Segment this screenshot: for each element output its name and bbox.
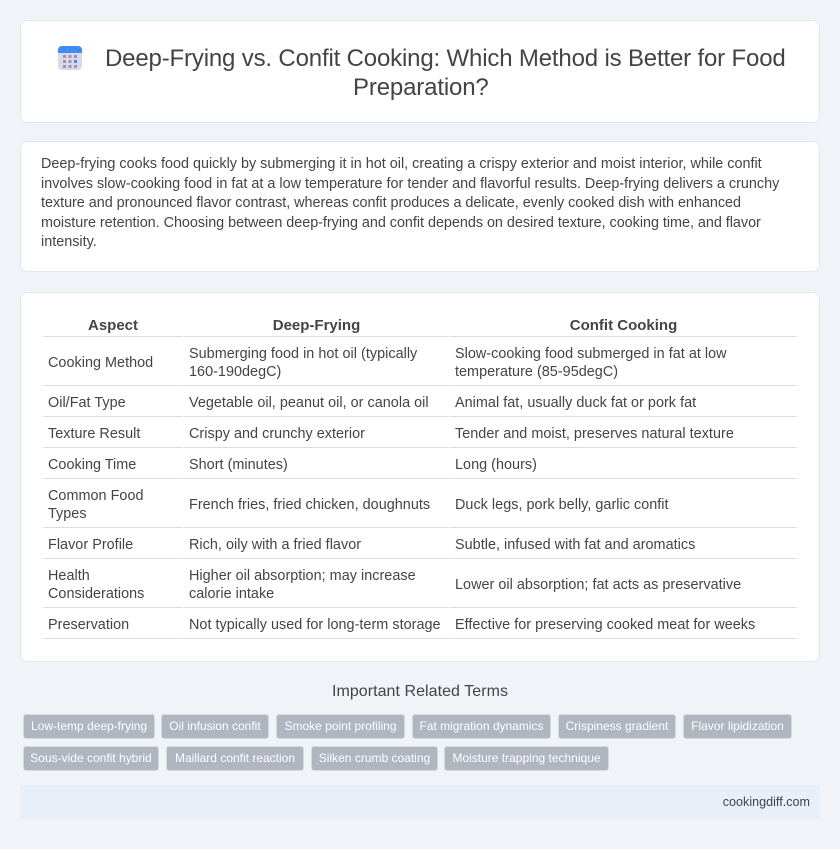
- header card: [20, 20, 820, 123]
- intro card: [20, 141, 820, 272]
- table rows: Texture Result: [48, 426, 140, 442]
- table rows: calorie intake: [189, 586, 274, 602]
- table rows: Crispy and crunchy exterior: [189, 426, 365, 442]
- table rows: Cooking Time: [48, 457, 136, 473]
- intro text: moisture retention. Choosing between deep-frying and confit depends on desired texture, cooking time, and flavor: [41, 214, 761, 230]
- intro text: involves slow-cooking food in fat at a low temperature for tender and flavorful results. Deep-frying delivers a crunchy: [41, 176, 779, 192]
- table rows: Submerging food in hot oil (typically: [189, 346, 417, 362]
- related terms tags: Crispiness gradient: [566, 719, 668, 733]
- table rows: Considerations: [48, 586, 144, 602]
- intro text: intensity.: [41, 234, 97, 250]
- table rows: Types: [48, 506, 87, 522]
- table rows: Common Food: [48, 488, 144, 504]
- table rows: Short (minutes): [189, 457, 288, 473]
- table rows: Oil/Fat Type: [48, 395, 126, 411]
- related terms tags: Maillard confit reaction: [175, 751, 295, 765]
- table rows: Cooking Method: [48, 355, 153, 371]
- table rows: Not typically used for long-term storage: [189, 617, 441, 633]
- related terms heading: Important Related Terms: [332, 683, 508, 700]
- icon: calendar: [58, 46, 82, 70]
- table rows: Health: [48, 568, 90, 584]
- table rows: French fries, fried chicken, doughnuts: [189, 497, 430, 513]
- table rows: Lower oil absorption; fat acts as preservative: [455, 577, 741, 593]
- related terms tags: Silken crumb coating: [319, 751, 430, 765]
- table header: Aspect: [88, 317, 138, 334]
- related terms tags: Oil infusion confit: [169, 719, 261, 733]
- table rows: Preservation: [48, 617, 129, 633]
- related terms tags: Flavor lipidization: [691, 719, 784, 733]
- table header: [88, 317, 677, 334]
- table rows: Rich, oily with a fried flavor: [189, 537, 361, 553]
- title: Deep-Frying vs. Confit Cooking: Which Method is Better for Food: [105, 45, 786, 72]
- related terms tags: Moisture trapping technique: [452, 751, 601, 765]
- intro text: Deep-frying cooks food quickly by submerging it in hot oil, creating a crispy exterior and moist interior, while confit: [41, 156, 762, 172]
- related terms tags: Sous-vide confit hybrid: [30, 751, 152, 765]
- intro text: [41, 156, 780, 250]
- table rows: Slow-cooking food submerged in fat at low: [455, 346, 727, 362]
- intro text: texture and pronounced flavor contrast, whereas confit produces a delicate, evenly cooked dish with enhanced: [41, 195, 741, 211]
- table rows: Effective for preserving cooked meat for weeks: [455, 617, 755, 633]
- table rows: Higher oil absorption; may increase: [189, 568, 416, 584]
- related terms tags: Smoke point profiling: [284, 719, 397, 733]
- footer bar: [20, 785, 820, 819]
- related terms tags: Low-temp deep-frying: [31, 719, 147, 733]
- title: Preparation?: [353, 74, 489, 101]
- related terms tags: Fat migration dynamics: [419, 719, 544, 733]
- table rows: Vegetable oil, peanut oil, or canola oil: [189, 395, 429, 411]
- table rows: Animal fat, usually duck fat or pork fat: [455, 395, 696, 411]
- table rows: temperature (85-95degC): [455, 364, 618, 380]
- table rows: Tender and moist, preserves natural texture: [455, 426, 734, 442]
- table rows: [43, 336, 797, 639]
- table rows: Long (hours): [455, 457, 537, 473]
- table rows: 160-190degC): [189, 364, 281, 380]
- table header: Deep-Frying: [273, 317, 360, 334]
- related terms tags: [23, 714, 792, 771]
- table header: Confit Cooking: [570, 317, 677, 334]
- table rows: Duck legs, pork belly, garlic confit: [455, 497, 669, 513]
- footer source text: cookingdiff.com: [723, 795, 810, 809]
- table rows: Flavor Profile: [48, 537, 133, 553]
- comparison table card: [20, 292, 820, 662]
- title: [105, 45, 786, 101]
- table rows: Subtle, infused with fat and aromatics: [455, 537, 695, 553]
